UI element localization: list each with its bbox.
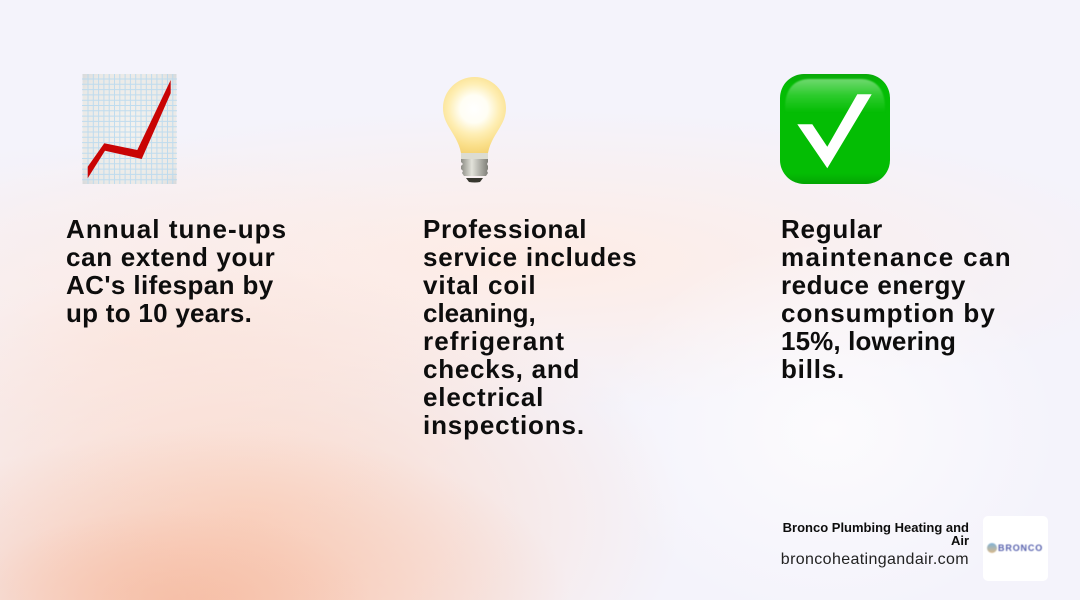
website: broncoheatingandair.com xyxy=(781,551,969,568)
text: professional service: Professional xyxy=(423,214,587,244)
text: regular maintenance: Regular xyxy=(781,214,883,244)
text: professional service xyxy=(423,214,637,440)
text: regular maintenance: 15%, lowering xyxy=(781,326,956,356)
logo wordmark: BRONCO xyxy=(998,543,1043,553)
text: regular maintenance xyxy=(781,214,1012,384)
text: professional service: vital coil xyxy=(423,270,537,300)
text: professional service: service includes xyxy=(423,242,637,272)
text: regular maintenance: bills. xyxy=(781,354,845,384)
text: tune-ups: AC's lifespan by xyxy=(66,270,274,300)
company name xyxy=(783,520,969,548)
text: regular maintenance: consumption by xyxy=(781,298,996,328)
logo icon xyxy=(987,543,997,553)
text: regular maintenance: reduce energy xyxy=(781,270,966,300)
logo card xyxy=(983,516,1048,581)
icon: light bulb xyxy=(443,77,506,182)
text: professional service: inspections. xyxy=(423,410,585,440)
text: tune-ups xyxy=(66,214,287,328)
company name: Air xyxy=(951,533,969,548)
text: professional service: cleaning, xyxy=(423,298,536,328)
text: tune-ups: Annual tune-ups xyxy=(66,214,287,244)
text: tune-ups: can extend your xyxy=(66,242,275,272)
text: professional service: electrical xyxy=(423,382,544,412)
icon: green check box xyxy=(780,74,890,184)
company name: Bronco Plumbing Heating and xyxy=(783,520,969,535)
icon: rising chart xyxy=(82,74,177,184)
text: regular maintenance: maintenance can xyxy=(781,242,1012,272)
text: professional service: refrigerant xyxy=(423,326,565,356)
text: professional service: checks, and xyxy=(423,354,580,384)
text: tune-ups: up to 10 years. xyxy=(66,298,252,328)
